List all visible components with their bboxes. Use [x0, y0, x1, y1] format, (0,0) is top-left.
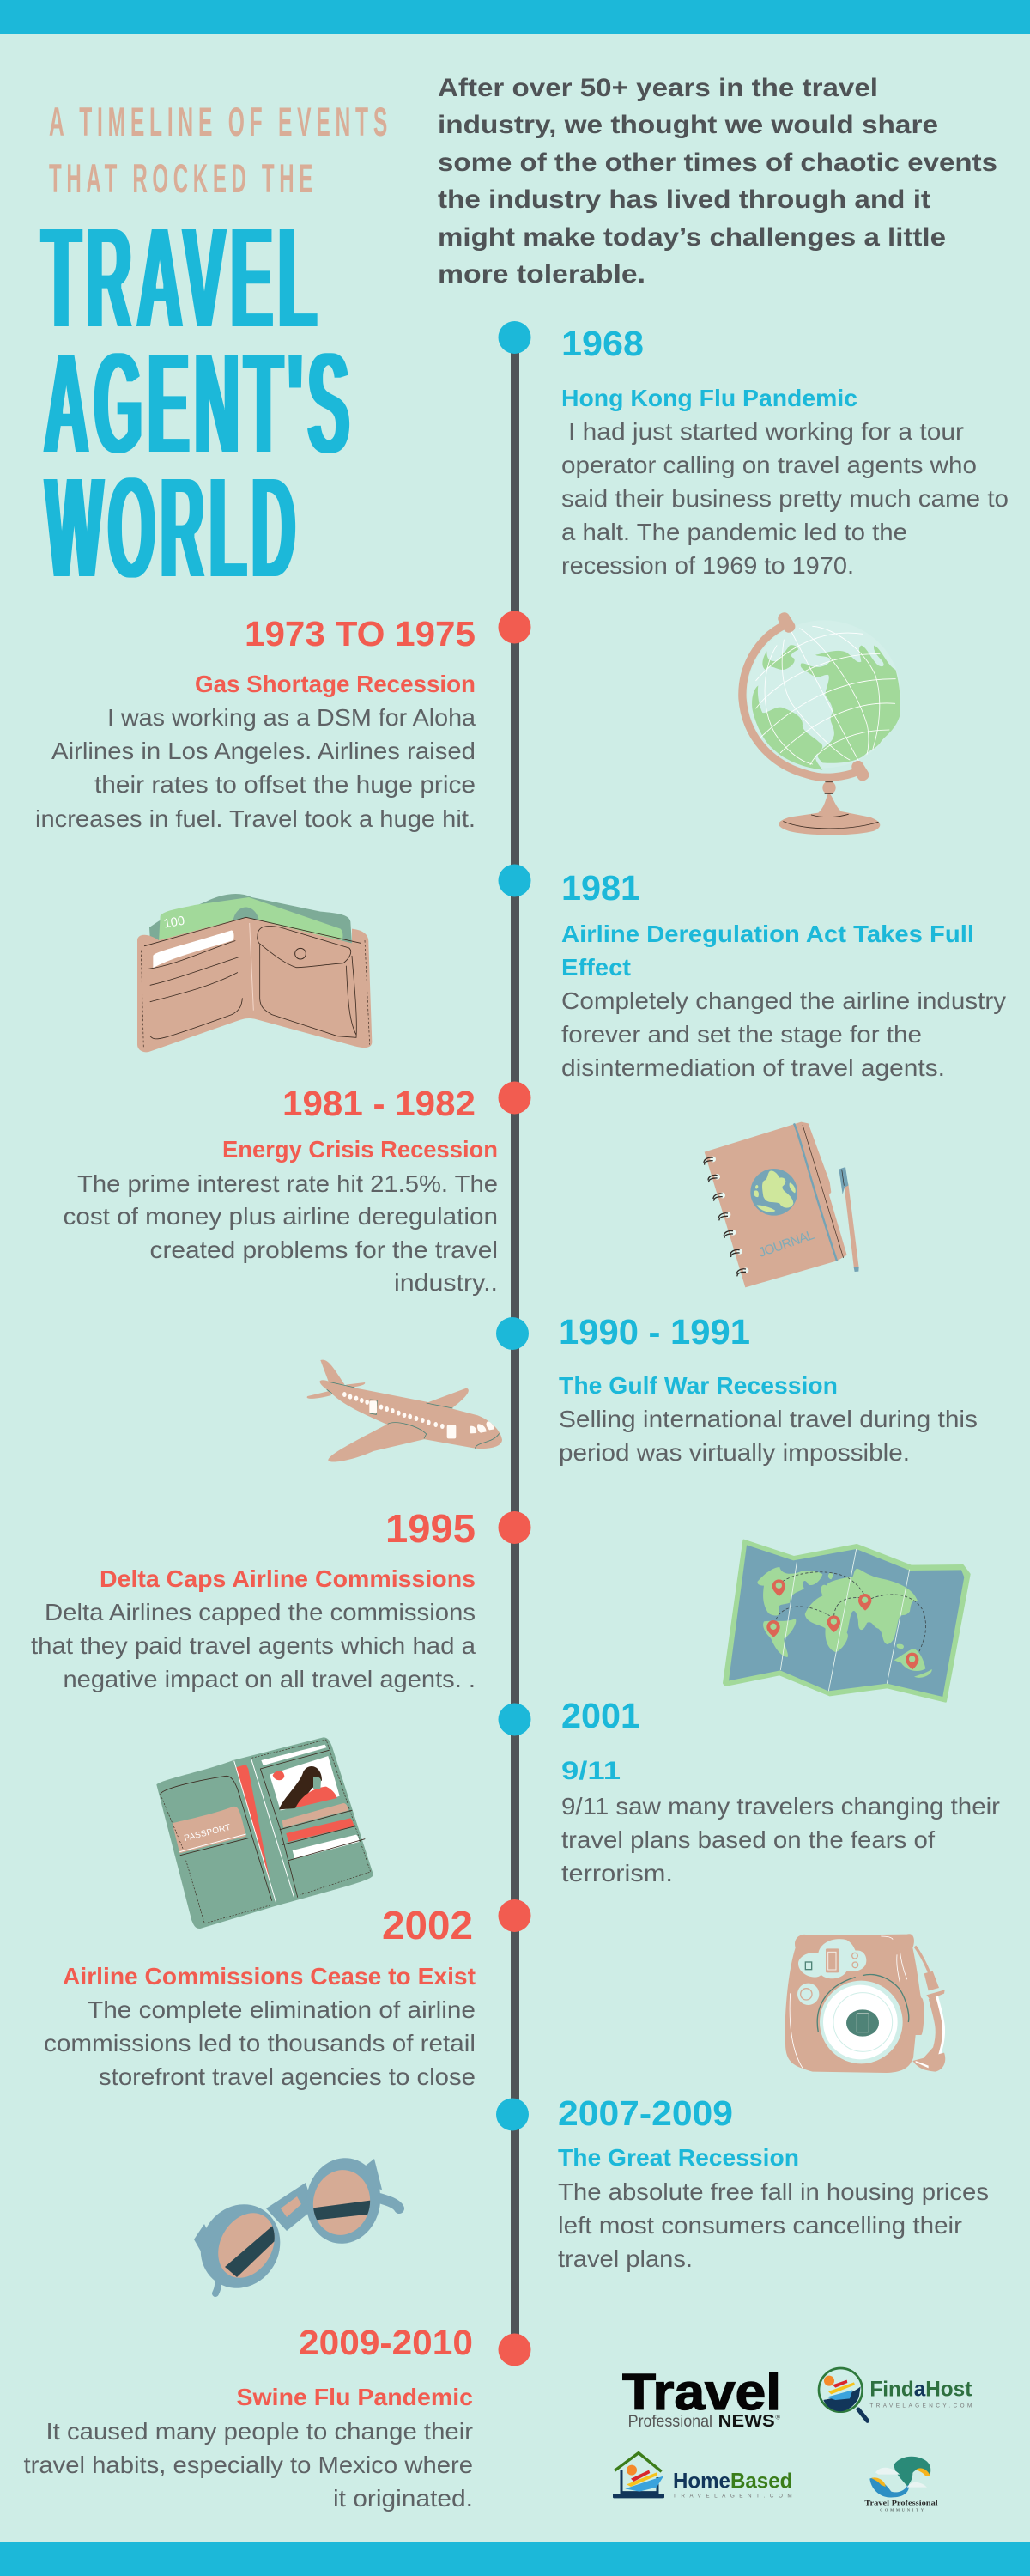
- event description: left most consumers cancelling their: [558, 2212, 962, 2239]
- logo: Travel Professional News: ®: [775, 2413, 780, 2421]
- event description: it originated.: [333, 2485, 473, 2512]
- icon: globe: [742, 611, 900, 835]
- logo: Travel Professional News: Professional: [628, 2413, 712, 2431]
- logo: Travel Professional Community: [864, 2457, 938, 2512]
- intro paragraph: some of the other times of chaotic events: [438, 149, 997, 177]
- title block: [42, 99, 392, 610]
- event: 2009-2010: [24, 2323, 530, 2512]
- event description: The prime interest rate hit 21.5%. The: [77, 1170, 498, 1197]
- event description: [35, 704, 476, 832]
- timeline axis: [511, 337, 519, 2350]
- event description: industry..: [394, 1269, 498, 1296]
- event description: recession of 1969 to 1970.: [561, 552, 854, 579]
- year: 1981: [561, 868, 640, 908]
- marker dot: [498, 611, 530, 644]
- intro paragraph: [438, 74, 997, 289]
- logo: Travel Professional Community: Travel Professional: [864, 2498, 938, 2506]
- event description: operator calling on travel agents who: [561, 452, 977, 478]
- kicker heading: A TIMELINE OF EVENTS: [49, 99, 392, 144]
- marker dot: [498, 1511, 530, 1544]
- event description: that they paid travel agents which had a: [31, 1632, 476, 1659]
- event description: terrorism.: [561, 1860, 673, 1886]
- event description: disintermediation of travel agents.: [561, 1054, 945, 1081]
- event description: increases in fuel. Travel took a huge hit.: [35, 805, 476, 832]
- icon: world map: [724, 1540, 969, 1701]
- event description: 9/11 saw many travelers changing their: [561, 1793, 1000, 1820]
- event heading: Energy Crisis Recession: [222, 1136, 498, 1163]
- year: 1973 TO 1975: [245, 614, 476, 653]
- year: 2002: [382, 1903, 473, 1947]
- main heading: WORLD: [45, 447, 300, 610]
- logo: Travel Professional News: NEWS: [718, 2411, 775, 2431]
- event description: [558, 2178, 989, 2272]
- event: 1973 to 1975: [35, 611, 530, 832]
- logo: Find a Host Travel Agency: [819, 2368, 972, 2421]
- event: 2007-2009: [496, 2093, 989, 2272]
- logo: Travel Professional News: Travel: [622, 2363, 781, 2421]
- intro paragraph: might make today’s challenges a little: [438, 223, 946, 252]
- logo: Home Based Travel Agent: HomeBased: [673, 2469, 792, 2493]
- marker dot: [496, 1317, 529, 1350]
- event description: travel habits, especially to Mexico where: [24, 2451, 473, 2478]
- event description: forever and set the stage for the: [561, 1021, 922, 1048]
- year: 2007-2009: [558, 2093, 733, 2133]
- event description: their rates to offset the huge price: [94, 771, 476, 798]
- event description: The absolute free fall in housing prices: [558, 2178, 989, 2205]
- event heading: [561, 920, 974, 981]
- kicker heading: THAT ROCKED THE: [49, 155, 318, 201]
- passport label: PASSPORT: [183, 1823, 232, 1844]
- event: 1990 - 1991: [496, 1312, 978, 1466]
- event description: [561, 987, 1006, 1081]
- top bar: [0, 0, 1030, 34]
- event description: created problems for the travel: [149, 1236, 498, 1263]
- event description: storefront travel agencies to close: [99, 2063, 476, 2090]
- intro paragraph: the industry has lived through and it: [438, 185, 930, 214]
- event description: I was working as a DSM for Aloha: [107, 704, 476, 731]
- event description: travel plans based on the fears of: [561, 1826, 935, 1853]
- year: 1981 - 1982: [282, 1084, 476, 1123]
- event description: It caused many people to change their: [46, 2418, 473, 2445]
- marker dot: [498, 2334, 530, 2366]
- logo: Travel Professional Community: COMMUNITY: [880, 2508, 924, 2512]
- title block: TRAVEL: [42, 197, 322, 360]
- intro paragraph: more tolerable.: [438, 260, 645, 289]
- logo: Home Based Travel Agent: [613, 2453, 792, 2500]
- marker dot: [498, 1082, 530, 1115]
- marker dot: [498, 321, 530, 354]
- event description: The complete elimination of airline: [88, 1996, 476, 2023]
- main heading: [42, 197, 354, 610]
- event description: period was virtually impossible.: [559, 1439, 910, 1466]
- event description: cost of money plus airline deregulation: [64, 1203, 498, 1230]
- event description: said their business pretty much came to: [561, 485, 1009, 512]
- bottom bar: [0, 2542, 1030, 2576]
- marker dot: [498, 1899, 530, 1932]
- event description: [64, 1170, 498, 1296]
- icon: instant camera: [785, 1934, 945, 2073]
- infographic canvas: AGENT'S: [44, 322, 354, 485]
- intro paragraph: After over 50+ years in the travel: [438, 74, 878, 102]
- event description: travel plans.: [558, 2245, 693, 2272]
- event description: a halt. The pandemic led to the: [561, 519, 907, 545]
- event heading: Airline Deregulation Act Takes Full: [561, 920, 974, 947]
- intro paragraph: industry, we thought we would share: [438, 111, 938, 139]
- icon: journal: [704, 1122, 859, 1287]
- event: 2002: [44, 1899, 530, 2090]
- event heading: Swine Flu Pandemic: [237, 2384, 473, 2410]
- logo: Home Based Travel Agent: TRAVELAGENT.COM: [673, 2494, 792, 2500]
- cover label: JOURNAL: [757, 1227, 817, 1261]
- event description: I had just started working for a tour: [568, 418, 964, 445]
- logo: Find a Host Travel Agency: TRAVELAGENCY.COM: [869, 2403, 972, 2409]
- event description: [559, 1406, 978, 1466]
- event description: Selling international travel during this: [559, 1406, 978, 1432]
- logo: Find a Host Travel Agency: FindaHost: [869, 2378, 972, 2402]
- event: 1995: [31, 1506, 530, 1692]
- event: 2001: [498, 1696, 1000, 1886]
- year: 1995: [385, 1506, 476, 1551]
- icon: airplane: [307, 1360, 502, 1462]
- year: 1990 - 1991: [559, 1312, 750, 1352]
- icon: wallet: [137, 894, 372, 1052]
- event description: Airlines in Los Angeles. Airlines raised: [52, 738, 476, 764]
- icon: sunglasses: [185, 2152, 399, 2303]
- event heading: The Gulf War Recession: [559, 1372, 838, 1399]
- event heading: The Great Recession: [558, 2144, 799, 2171]
- event description: [561, 418, 1009, 579]
- marker dot: [496, 2099, 529, 2131]
- event description: [44, 1996, 476, 2090]
- event heading: Airline Commissions Cease to Exist: [63, 1963, 476, 1990]
- year: 2009-2010: [299, 2323, 473, 2362]
- event heading: Hong Kong Flu Pandemic: [561, 385, 857, 411]
- marker dot: [498, 1704, 530, 1736]
- event heading: Delta Caps Airline Commissions: [100, 1565, 476, 1592]
- icon: passport holder: [156, 1737, 373, 1929]
- event description: Delta Airlines capped the commissions: [45, 1599, 476, 1625]
- event description: [24, 2418, 473, 2512]
- event description: negative impact on all travel agents. .: [64, 1666, 476, 1692]
- event: 1981 - 1982: [64, 1082, 530, 1296]
- event heading: Effect: [561, 954, 631, 981]
- year: 1968: [561, 324, 644, 363]
- event heading: Gas Shortage Recession: [195, 671, 476, 697]
- event description: [31, 1599, 476, 1692]
- kicker heading: [49, 99, 392, 201]
- event: 1968: [498, 321, 1009, 579]
- event description: [561, 1793, 1000, 1886]
- event heading: 9/11: [561, 1757, 621, 1785]
- marker dot: [498, 864, 530, 896]
- year: 2001: [561, 1696, 640, 1735]
- event description: commissions led to thousands of retail: [44, 2030, 476, 2057]
- banknote value: 100: [163, 914, 185, 932]
- event: 1981: [498, 864, 1006, 1081]
- event description: Completely changed the airline industry: [561, 987, 1006, 1014]
- logos: partner brands: [613, 2363, 972, 2512]
